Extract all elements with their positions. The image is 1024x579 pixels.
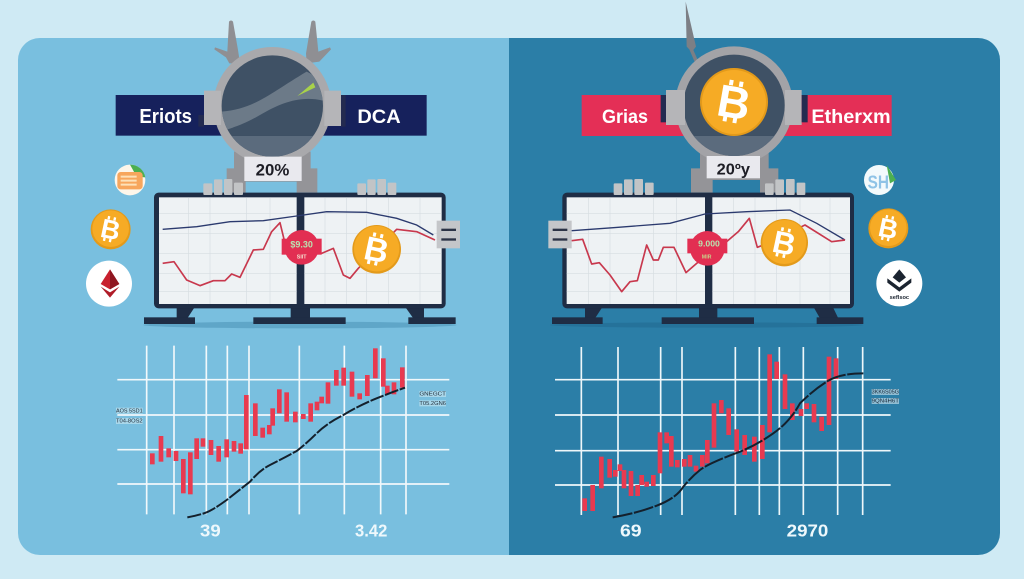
- badge: price: [282, 230, 322, 265]
- monitor supports: [203, 179, 396, 195]
- icon: orange hand: [115, 165, 145, 195]
- label: 20oy: 20ºy: [717, 162, 750, 179]
- icon: SH badge: [864, 165, 896, 195]
- candles: [150, 348, 405, 494]
- left top section: gauge and monitors: [86, 20, 460, 328]
- panel: left background: [18, 38, 509, 555]
- banner: Grias and Etherxm: Grias: [602, 107, 648, 128]
- axis values: [620, 521, 828, 541]
- monitor: dual screens: [143, 193, 460, 328]
- line: red price: [572, 218, 845, 292]
- axis values: [200, 521, 387, 541]
- icon: bitcoin coin: B: [98, 213, 123, 246]
- banner: Grias and Etherxm: Etherxm: [811, 107, 891, 128]
- right top section: gauge and monitors: [548, 2, 922, 328]
- icon: bitcoin coin: [91, 209, 131, 249]
- gauge: right dial with needle: [661, 2, 808, 193]
- axis values: 69: [620, 521, 642, 541]
- icon: dark token: seflsoc: [890, 295, 909, 301]
- banner: Eriots and DCA: DCA: [357, 107, 401, 128]
- side note right: [419, 391, 447, 407]
- axis values: 2970: [787, 521, 828, 541]
- monitor: dual screens: [548, 193, 863, 328]
- line: blue trend: [163, 212, 433, 235]
- side note left: T04-8OS2: [116, 419, 143, 425]
- badge: price: MIR: [702, 254, 712, 260]
- icon: bitcoin coin: B: [876, 212, 901, 245]
- coin: bitcoin on monitor: B: [361, 230, 392, 271]
- label: 20%: [244, 157, 302, 181]
- dashed trend line: [187, 388, 405, 517]
- line: red price: [163, 223, 435, 286]
- coin: bitcoin in gauge: [700, 68, 768, 136]
- label: 20%: 20%: [256, 162, 290, 180]
- coin: bitcoin on monitor: [761, 219, 808, 266]
- badge: price: SIIT: [297, 254, 307, 260]
- side note right: GNEGCT: [419, 392, 447, 398]
- side note right: T05.2GN6: [419, 401, 446, 407]
- line: blue trend: [572, 210, 845, 240]
- chart grid: [117, 346, 449, 514]
- label: 20oy: [707, 156, 760, 179]
- side note right: 3KK6S05G: [872, 390, 899, 396]
- icon: bitcoin coin: [868, 208, 908, 248]
- banner: Grias and Etherxm: [582, 95, 892, 136]
- gauge: left dial with prongs: [198, 20, 346, 193]
- monitor side tab: [437, 221, 460, 248]
- banner: Eriots and DCA: [116, 95, 427, 136]
- coin: bitcoin on monitor: B: [769, 224, 799, 263]
- badge: price: 9.000: [698, 239, 720, 249]
- side note left: AOS 5SD1: [116, 408, 143, 414]
- monitor side tab: [548, 221, 572, 248]
- monitor supports: [614, 179, 805, 195]
- candles: [582, 354, 838, 511]
- panel: right background: [509, 38, 1000, 555]
- axis values: 39: [200, 521, 221, 541]
- badge: price: $9.30: [290, 239, 313, 249]
- chart grid: [555, 347, 891, 515]
- dashed trend line: [613, 373, 863, 517]
- right candlestick chart: [555, 347, 900, 541]
- side note left: [116, 408, 143, 425]
- coin: bitcoin on monitor: [352, 225, 401, 274]
- coin: bitcoin in gauge: B: [713, 75, 754, 130]
- icon: dark token: [876, 260, 922, 306]
- icon: SH badge: SH: [868, 171, 889, 192]
- banner: Eriots and DCA: Eriots: [139, 106, 192, 128]
- icon: ethereum: [86, 261, 132, 307]
- badge: price: [687, 231, 727, 266]
- side note right: 9QN4H6T: [872, 399, 900, 405]
- left candlestick chart: [116, 346, 449, 541]
- axis values: 3.42: [355, 521, 387, 541]
- side note right: [872, 389, 900, 405]
